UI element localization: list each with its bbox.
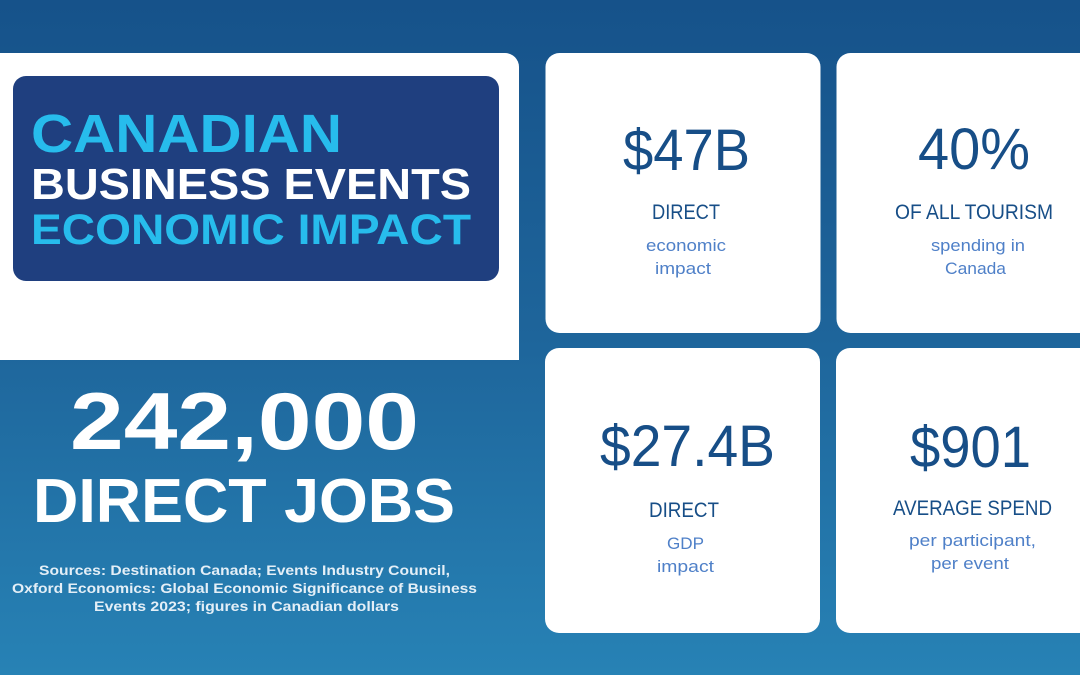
stat description: per event: [931, 554, 1009, 573]
stat description: [646, 236, 727, 278]
title line: Business Events: BUSINESS EVENTS: [31, 160, 471, 209]
panel: title: [0, 53, 519, 360]
sources note: Oxford Economics: Global Economic Significance of Business: [12, 580, 477, 596]
title line: Economic Impact: ECONOMIC IMPACT: [31, 206, 471, 254]
stat value: 40%: [918, 117, 1030, 182]
stat description: per participant,: [909, 531, 1036, 550]
sources note: Sources: Destination Canada; Events Industry Council,: [39, 562, 450, 578]
headline stat: direct jobs: [33, 377, 455, 536]
title line: Canadian: CANADIAN: [31, 104, 342, 164]
title banner: [13, 76, 499, 281]
card: 40% of all tourism spending: [836, 53, 1080, 333]
stat label: DIRECT: [649, 499, 719, 522]
stat description: [657, 534, 714, 576]
stat label: OF ALL TOURISM: [895, 201, 1053, 224]
jobs label: DIRECT JOBS: [33, 467, 455, 536]
stat description: GDP: [667, 534, 704, 553]
stat description: spending in: [931, 236, 1025, 255]
stat description: impact: [657, 557, 714, 576]
sources note: [12, 562, 477, 614]
stat description: impact: [655, 259, 711, 278]
stat value: $27.4B: [600, 414, 775, 479]
card: $47B direct economic impact: [546, 53, 820, 333]
card: $27.4B direct GDP impact: [545, 348, 820, 633]
stat description: Canada: [945, 259, 1007, 278]
stat value: $901: [910, 415, 1031, 480]
stat label: DIRECT: [652, 201, 720, 224]
jobs number: 242,000: [70, 377, 419, 467]
sources note: Events 2023; figures in Canadian dollars: [94, 598, 399, 614]
stat value: $47B: [623, 118, 750, 183]
stat label: AVERAGE SPEND: [893, 497, 1052, 520]
stat description: [931, 236, 1025, 278]
stat description: economic: [646, 236, 727, 255]
card: $901 average spend: [836, 348, 1080, 633]
stat description: [909, 531, 1036, 573]
